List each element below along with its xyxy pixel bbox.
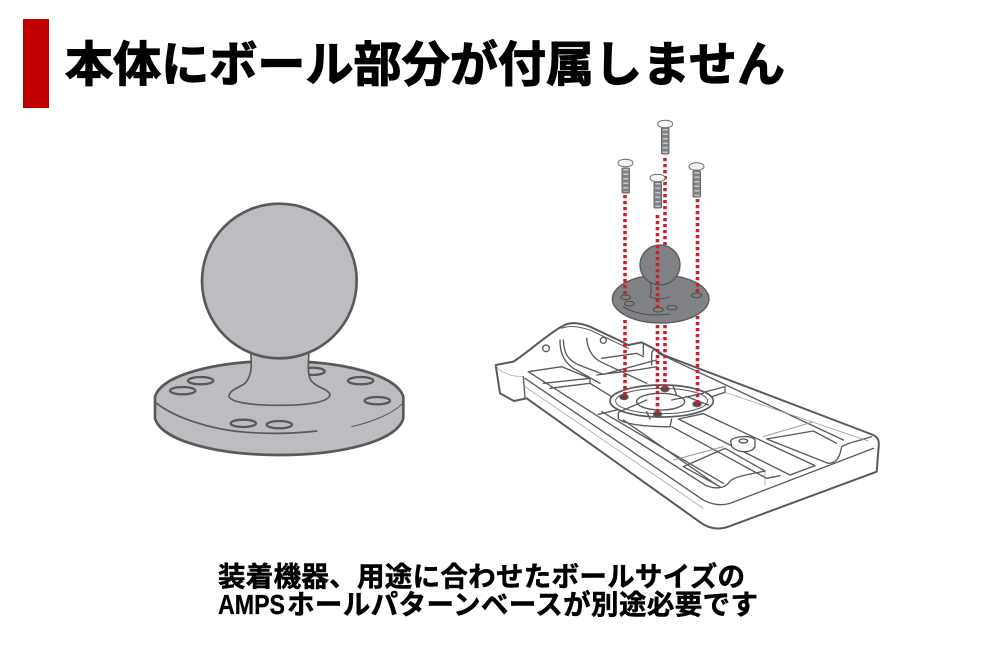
small neck: [650, 282, 670, 299]
title: 本体にボール部分が付属しません: [65, 39, 785, 92]
illustration: small ball mount: [612, 245, 709, 323]
lower rails: [590, 383, 612, 397]
caption line 2: model name: AMPS: [218, 589, 285, 620]
caption line 1: 装着機器、用途に合わせたボールサイズの: [218, 561, 745, 592]
illustration: ball mount enlarged: [155, 204, 403, 455]
dotted guide lines in front of the small mount: [625, 195, 698, 310]
dotted guide lines behind the small mount: [625, 158, 698, 414]
tray outline: [496, 323, 879, 529]
plate: [155, 361, 403, 455]
plate holes: [170, 368, 390, 428]
screw 2: [658, 120, 673, 154]
neck: [229, 352, 330, 405]
heading accent bar: [23, 19, 49, 108]
upper left wall: [528, 367, 590, 388]
small ball: [640, 245, 680, 285]
ball: [202, 204, 357, 358]
screw 4: [689, 163, 704, 197]
screw 1: [618, 159, 633, 193]
rim lines: [525, 378, 873, 505]
screw 3: [650, 174, 665, 208]
caption line 2: remainder: ホールパターンベースが別途必要です: [287, 589, 758, 620]
small plate holes: [621, 293, 702, 312]
mounting ring: [598, 385, 725, 427]
icon: screws: [618, 120, 704, 208]
tray screw holes: [620, 386, 701, 416]
raised boss: [731, 437, 755, 452]
small plate: [612, 275, 709, 323]
illustration: tray: [496, 323, 879, 529]
caption: [218, 561, 758, 620]
